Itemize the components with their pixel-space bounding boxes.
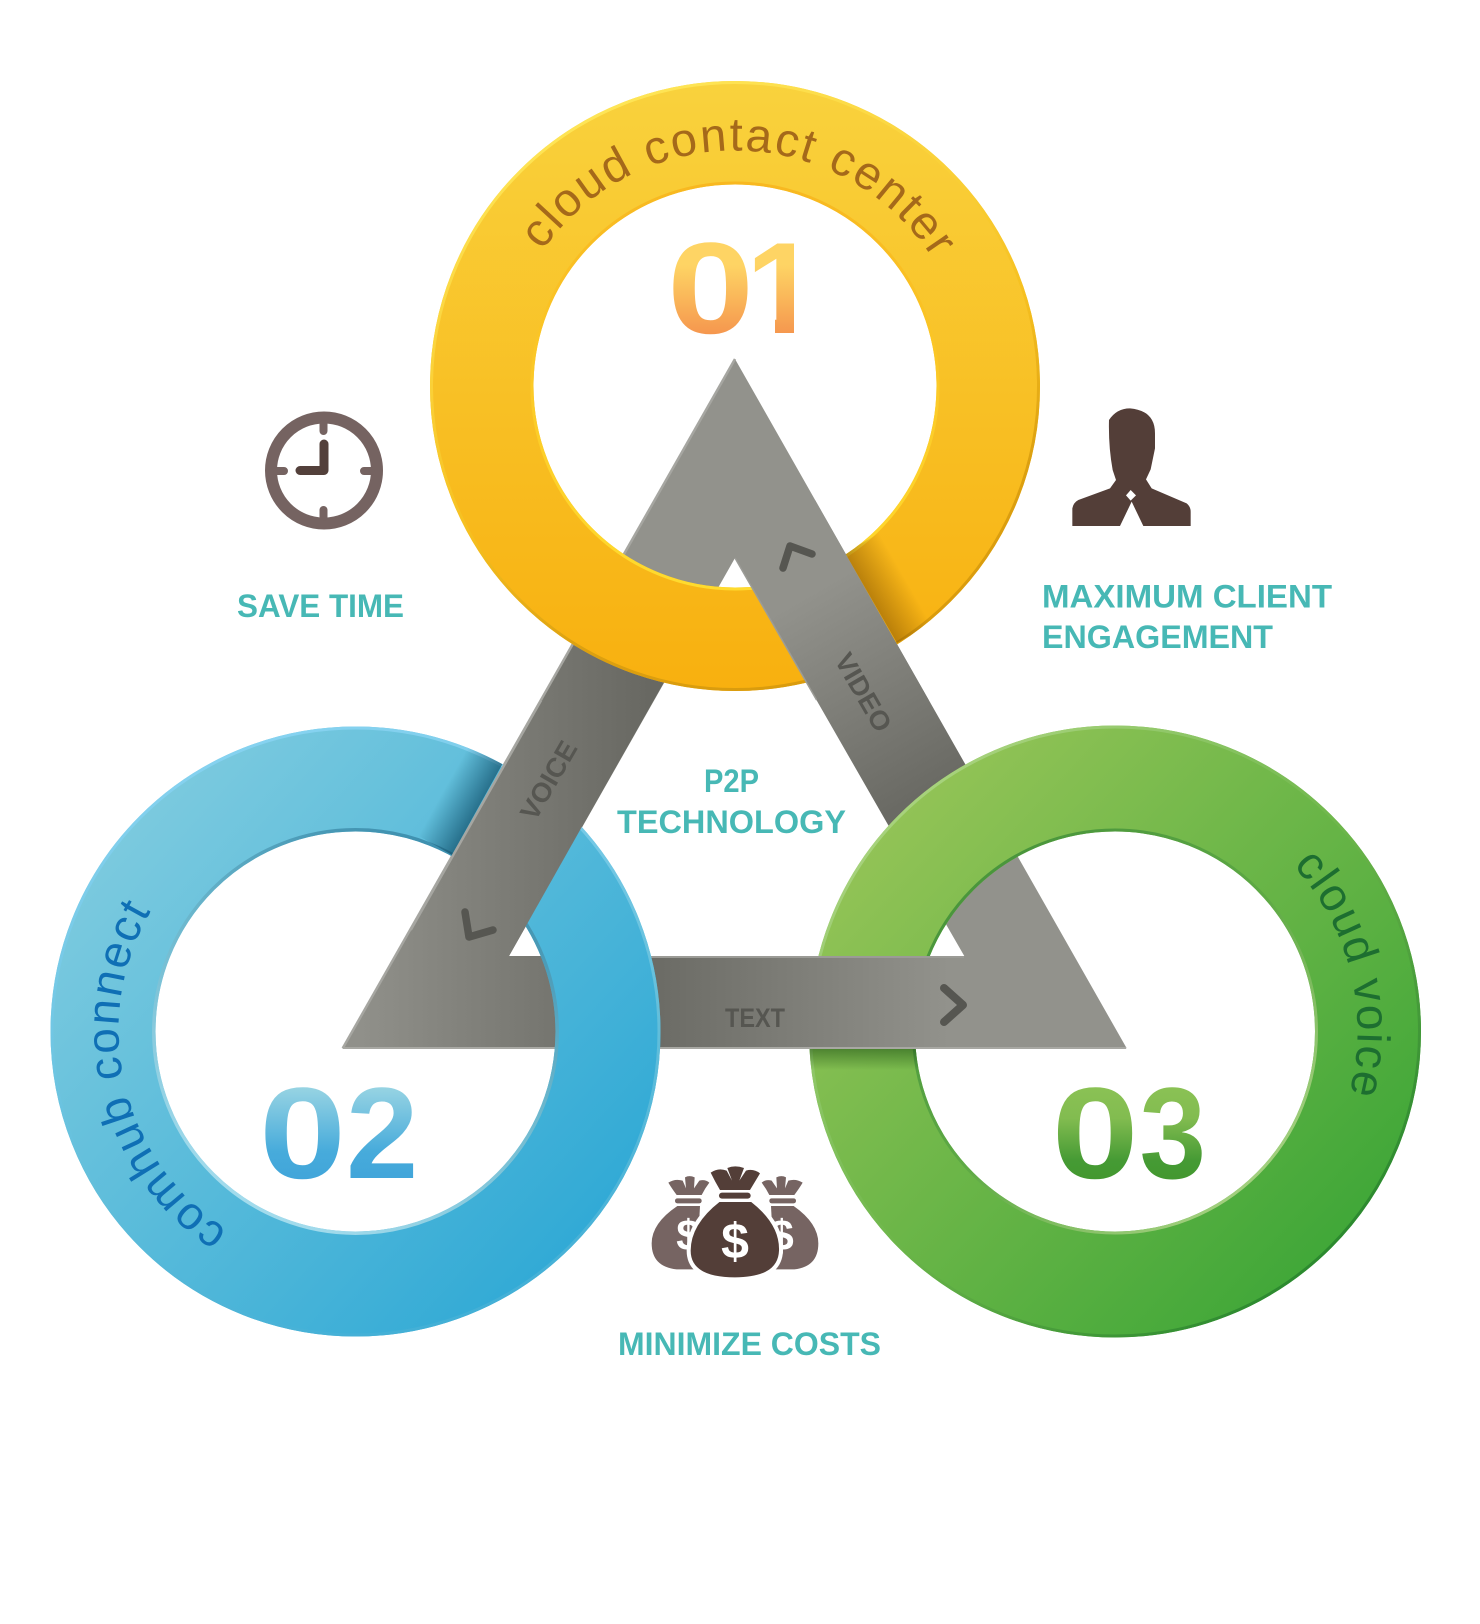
leg label: TEXT: TEXT xyxy=(725,1003,785,1033)
ring 1: cloud contact center xyxy=(430,81,1040,691)
label: p2p technology xyxy=(617,763,846,840)
arrow: text chevron xyxy=(944,988,963,1022)
ring 3: cloud voice xyxy=(810,726,1421,1338)
icon: money bags xyxy=(652,1166,818,1279)
triangle: base layer under the rings xyxy=(343,359,1127,1048)
label: maximum client engagement xyxy=(1042,578,1332,655)
number 03: 0 xyxy=(1052,1061,1139,1206)
label: p2p technology: P2P xyxy=(704,763,759,799)
icon: person in suit xyxy=(1072,408,1191,526)
icon: money bags: $ xyxy=(676,1213,700,1261)
number 02: 2 xyxy=(346,1060,418,1206)
number 02: 0 xyxy=(259,1061,346,1206)
triangle: voice leg passing over ring 2 xyxy=(411,700,653,956)
triangle: video leg passing over ring 1 xyxy=(735,500,929,700)
label: save time: SAVE TIME xyxy=(237,588,404,624)
ring 2: comhub connect xyxy=(50,726,660,1336)
icon: money bags: $ xyxy=(770,1213,794,1261)
label: minimize costs: MINIMIZE COSTS xyxy=(618,1326,881,1362)
label: maximum client engagement: MAXIMUM CLIENT xyxy=(1042,578,1332,614)
number 01: 0 xyxy=(667,216,754,361)
number 03 xyxy=(1052,1061,1206,1206)
icon: money bags: $ xyxy=(721,1214,749,1270)
number 02 xyxy=(259,1060,418,1206)
label: maximum client engagement: ENGAGEMENT xyxy=(1042,619,1273,655)
ring 3 label: cloud voice xyxy=(1298,854,1391,1095)
shadows cast on the rings by the triangle legs xyxy=(405,525,945,1072)
arrow: voice chevron xyxy=(465,912,493,937)
ring 1 label: cloud contact center xyxy=(528,120,954,252)
number 03: 3 xyxy=(1140,1061,1206,1206)
number 01: 1 xyxy=(746,215,818,361)
number 01 xyxy=(673,242,794,334)
ring 2 label: comhub connect xyxy=(94,900,222,1246)
triangle: text band passing over ring 3 xyxy=(700,956,1126,1048)
leg label: VIDEO: VIDEO xyxy=(829,648,898,737)
arrow: video chevron xyxy=(783,546,812,568)
icon: clock xyxy=(271,418,377,524)
label: p2p technology: TECHNOLOGY xyxy=(617,804,846,840)
leg label: VOICE: VOICE xyxy=(514,736,583,825)
